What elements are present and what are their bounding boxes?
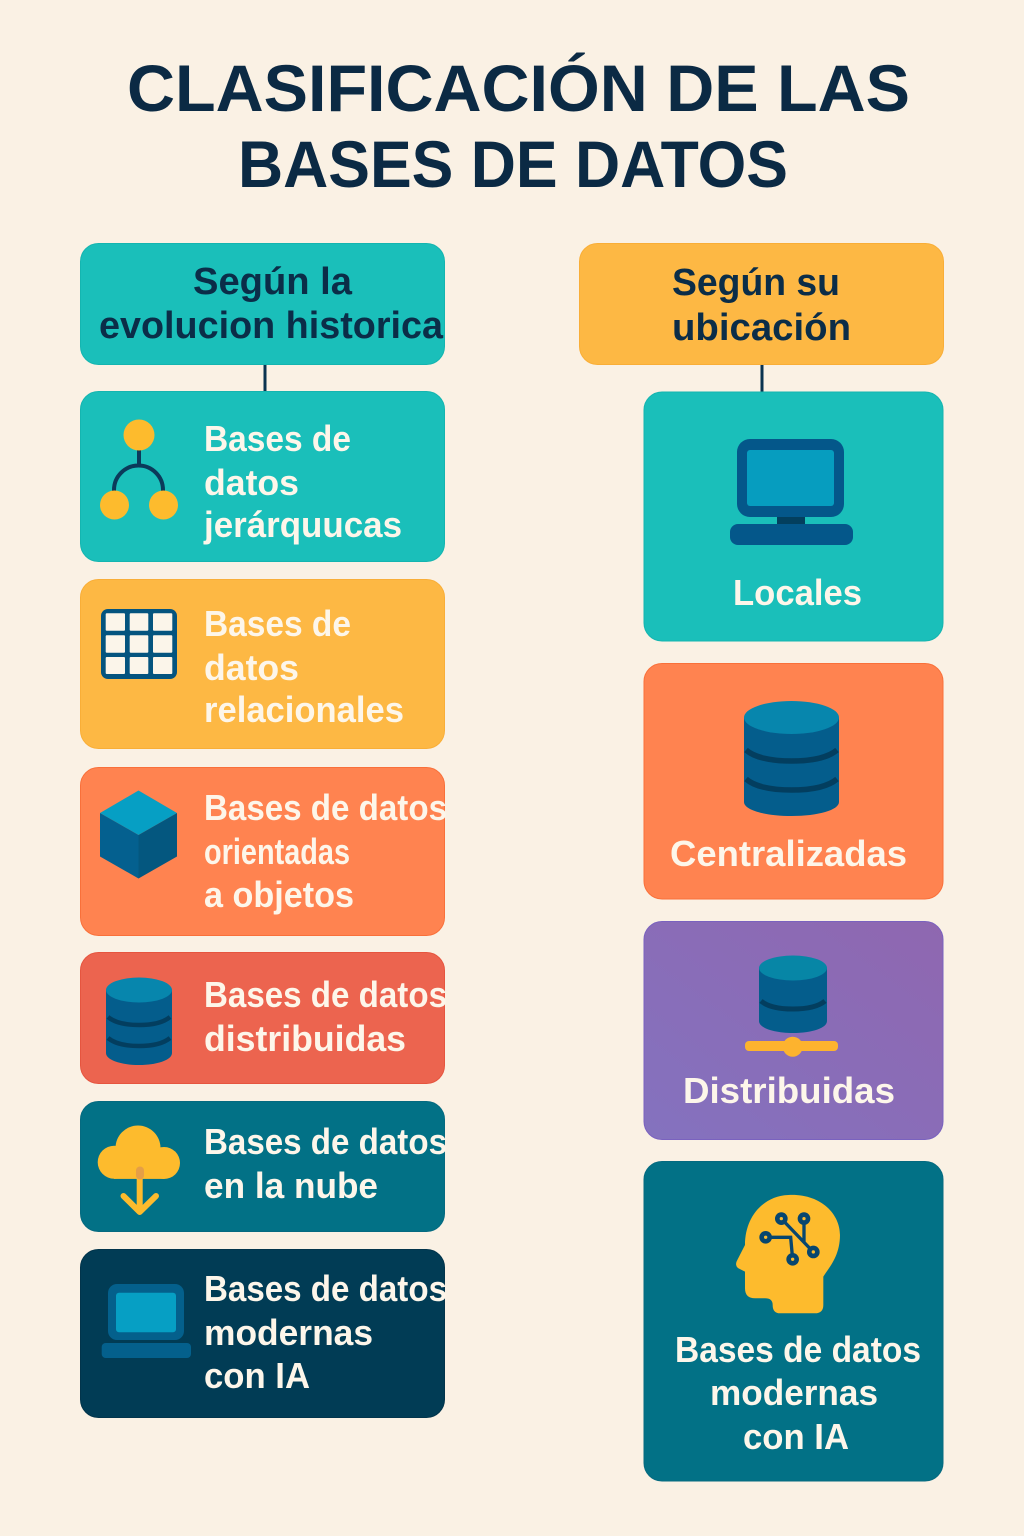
icon: database cylinder [106, 978, 172, 1065]
panel: right header, según su ubicación: ubicación [672, 307, 851, 349]
title [127, 51, 910, 201]
connector: right header to first card [760, 364, 764, 392]
card text: relacionales [204, 689, 404, 730]
card text [204, 974, 447, 1059]
panel: right header, según su ubicación: Según su [672, 262, 840, 304]
icon: table grid [101, 609, 177, 679]
card text: a objetos [204, 874, 354, 915]
icon: cloud with down arrow [98, 1126, 180, 1212]
panel: bases de datos distribuidas [80, 952, 447, 1084]
panel: bases de datos en la nube [80, 1102, 447, 1232]
card text: con IA [204, 1355, 310, 1396]
panel: bases de datos modernas con IA, right [644, 1162, 943, 1481]
icon: cube [100, 790, 177, 878]
panel: left header, según la evolución histórica: evolucion historica [99, 305, 444, 347]
panel: left header, según la evolución histórica: Según la [193, 261, 353, 303]
icon: database on network bar [745, 956, 838, 1057]
panel: bases de datos orientadas a objetos [80, 768, 447, 936]
card text: Distribuidas [683, 1070, 895, 1111]
card text: Bases de datos [204, 787, 447, 828]
card text: Locales [733, 572, 862, 613]
card text: Centralizadas [670, 833, 907, 874]
panel: locales [644, 392, 943, 641]
icon: hierarchy [100, 420, 178, 520]
icon: laptop [102, 1284, 191, 1358]
panel: bases de datos modernas con IA, left [80, 1250, 447, 1418]
card text: Bases de datos [204, 1268, 447, 1309]
panel: bases de datos jerárquicas [80, 392, 444, 562]
icon: head with circuit [736, 1195, 840, 1313]
card text [204, 1121, 447, 1206]
title: CLASIFICACIÓN DE LAS [127, 51, 910, 125]
panel: left header, según la evolución histórica [80, 244, 444, 364]
card text: Bases de [204, 603, 351, 644]
card text: jerárquucas [203, 504, 402, 545]
card text: Bases de [204, 418, 351, 459]
card text: distribuidas [204, 1018, 406, 1059]
card text: modernas [204, 1312, 373, 1353]
card text: Bases de datos [204, 974, 447, 1015]
card text: Bases de datos [675, 1329, 921, 1370]
icon: desktop computer [730, 439, 853, 545]
card text: datos [204, 647, 299, 688]
card text [204, 1268, 447, 1396]
icon: database cylinder [744, 701, 839, 816]
panel: centralizadas [644, 664, 943, 899]
card text: modernas [710, 1372, 878, 1413]
card text: en la nube [204, 1165, 378, 1206]
connector: left header to first card [264, 364, 266, 392]
card text [675, 1329, 921, 1457]
panel: bases de datos relacionales [80, 580, 444, 748]
card text [204, 787, 447, 915]
card text: con IA [743, 1416, 849, 1457]
card text [204, 603, 404, 730]
panel: distribuidas [644, 922, 943, 1140]
card text: orientadas [204, 831, 350, 872]
card text: Bases de datos [204, 1121, 447, 1162]
card text: datos [204, 462, 299, 503]
panel: right header, según su ubicación [580, 244, 944, 364]
card text [203, 418, 402, 545]
title: BASES DE DATOS [238, 127, 788, 201]
